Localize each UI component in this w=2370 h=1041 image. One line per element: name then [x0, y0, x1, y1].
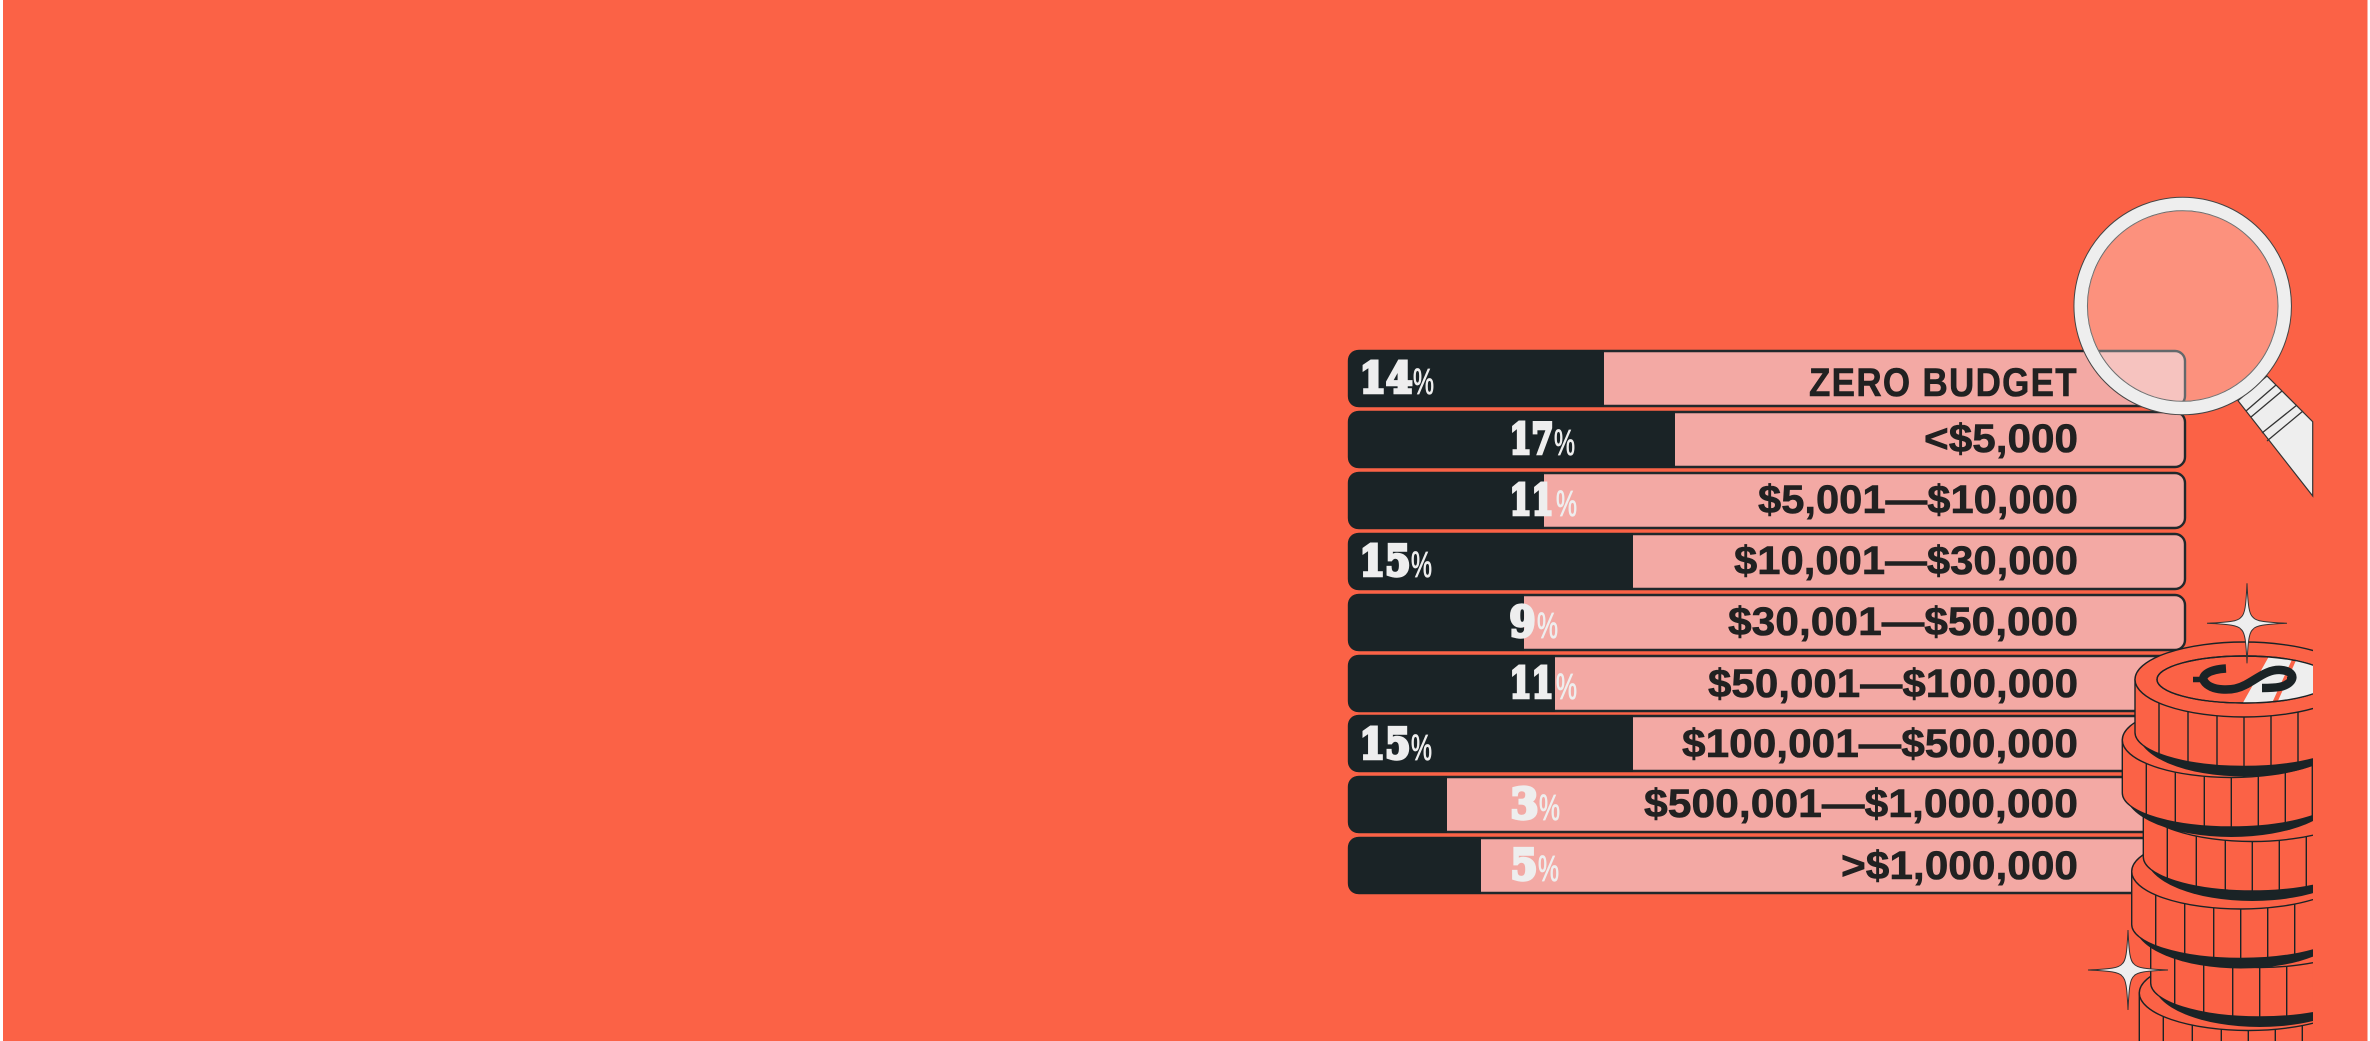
- bar: $100,001-$500,000 15%: $100,001—$500,000: [1682, 722, 2078, 766]
- bar: $100,001-$500,000 15%: %: [1411, 727, 1432, 768]
- bar: $500,001-$1,000,000 3%: [1348, 776, 2185, 833]
- bar: $10,001-$30,000 15%: %: [1411, 544, 1432, 585]
- bar: zero budget 14%: %: [1413, 361, 1434, 402]
- icon: sparkle bottom: [2088, 930, 2168, 1010]
- bar: $5,001-$10,000 11%: $5,001—$10,000: [1758, 478, 2078, 522]
- bar: zero budget 14%: ZERO BUDGET: [1809, 361, 2078, 405]
- icon: sparkle top: [2207, 583, 2287, 663]
- bar: $30,001-$50,000 9%: %: [1537, 605, 1558, 646]
- bar: $100,001-$500,000 15%: 15: [1360, 720, 1410, 768]
- bar: $5,001-$10,000 11%: %: [1556, 483, 1577, 524]
- bar: $10,001-$30,000 15%: [1348, 533, 2185, 590]
- bar: zero budget 14%: [1348, 350, 2185, 407]
- bar: $500,001-$1,000,000 3%: 3: [1510, 780, 1538, 828]
- bar: under $5,000 17%: [1348, 411, 2185, 468]
- icon: magnifying glass: [2081, 204, 2313, 496]
- bar: under $5,000 17%: <$5,000: [1924, 417, 2078, 461]
- bar: $50,001-$100,000 11%: [1348, 655, 2185, 712]
- bar: $50,001-$100,000 11%: $50,001—$100,000: [1708, 662, 2078, 706]
- bar: $100,001-$500,000 15%: [1348, 715, 2185, 772]
- bar: over $1,000,000 5%: [1348, 837, 2185, 894]
- bar: $50,001-$100,000 11%: 11: [1510, 658, 1554, 708]
- bar: $10,001-$30,000 15%: $10,001—$30,000: [1734, 539, 2078, 583]
- bar: $500,001-$1,000,000 3%: $500,001—$1,000,000: [1644, 782, 2078, 826]
- bar: $30,001-$50,000 9%: $30,001—$50,000: [1728, 600, 2078, 644]
- bar: $5,001-$10,000 11%: 11: [1510, 476, 1554, 524]
- top coin face: [2156, 655, 2313, 704]
- icon: stack of coins: [2122, 641, 2313, 1041]
- bar: over $1,000,000 5%: 5: [1510, 840, 1538, 890]
- bar: zero budget 14%: 14: [1360, 354, 1412, 402]
- bar: $10,001-$30,000 15%: 15: [1360, 536, 1410, 586]
- bar: $50,001-$100,000 11%: %: [1556, 666, 1577, 707]
- bar: $500,001-$1,000,000 3%: %: [1539, 787, 1560, 828]
- bar: $30,001-$50,000 9%: [1348, 594, 2185, 651]
- bar: $5,001-$10,000 11%: [1348, 472, 2185, 529]
- bar chart: budget distribution: [1348, 350, 2185, 894]
- bar: over $1,000,000 5%: %: [1538, 848, 1559, 889]
- bar: over $1,000,000 5%: >$1,000,000: [1841, 844, 2078, 888]
- bar: under $5,000 17%: 17: [1510, 414, 1554, 464]
- bar: under $5,000 17%: %: [1554, 422, 1575, 463]
- bar: $30,001-$50,000 9%: 9: [1510, 598, 1536, 646]
